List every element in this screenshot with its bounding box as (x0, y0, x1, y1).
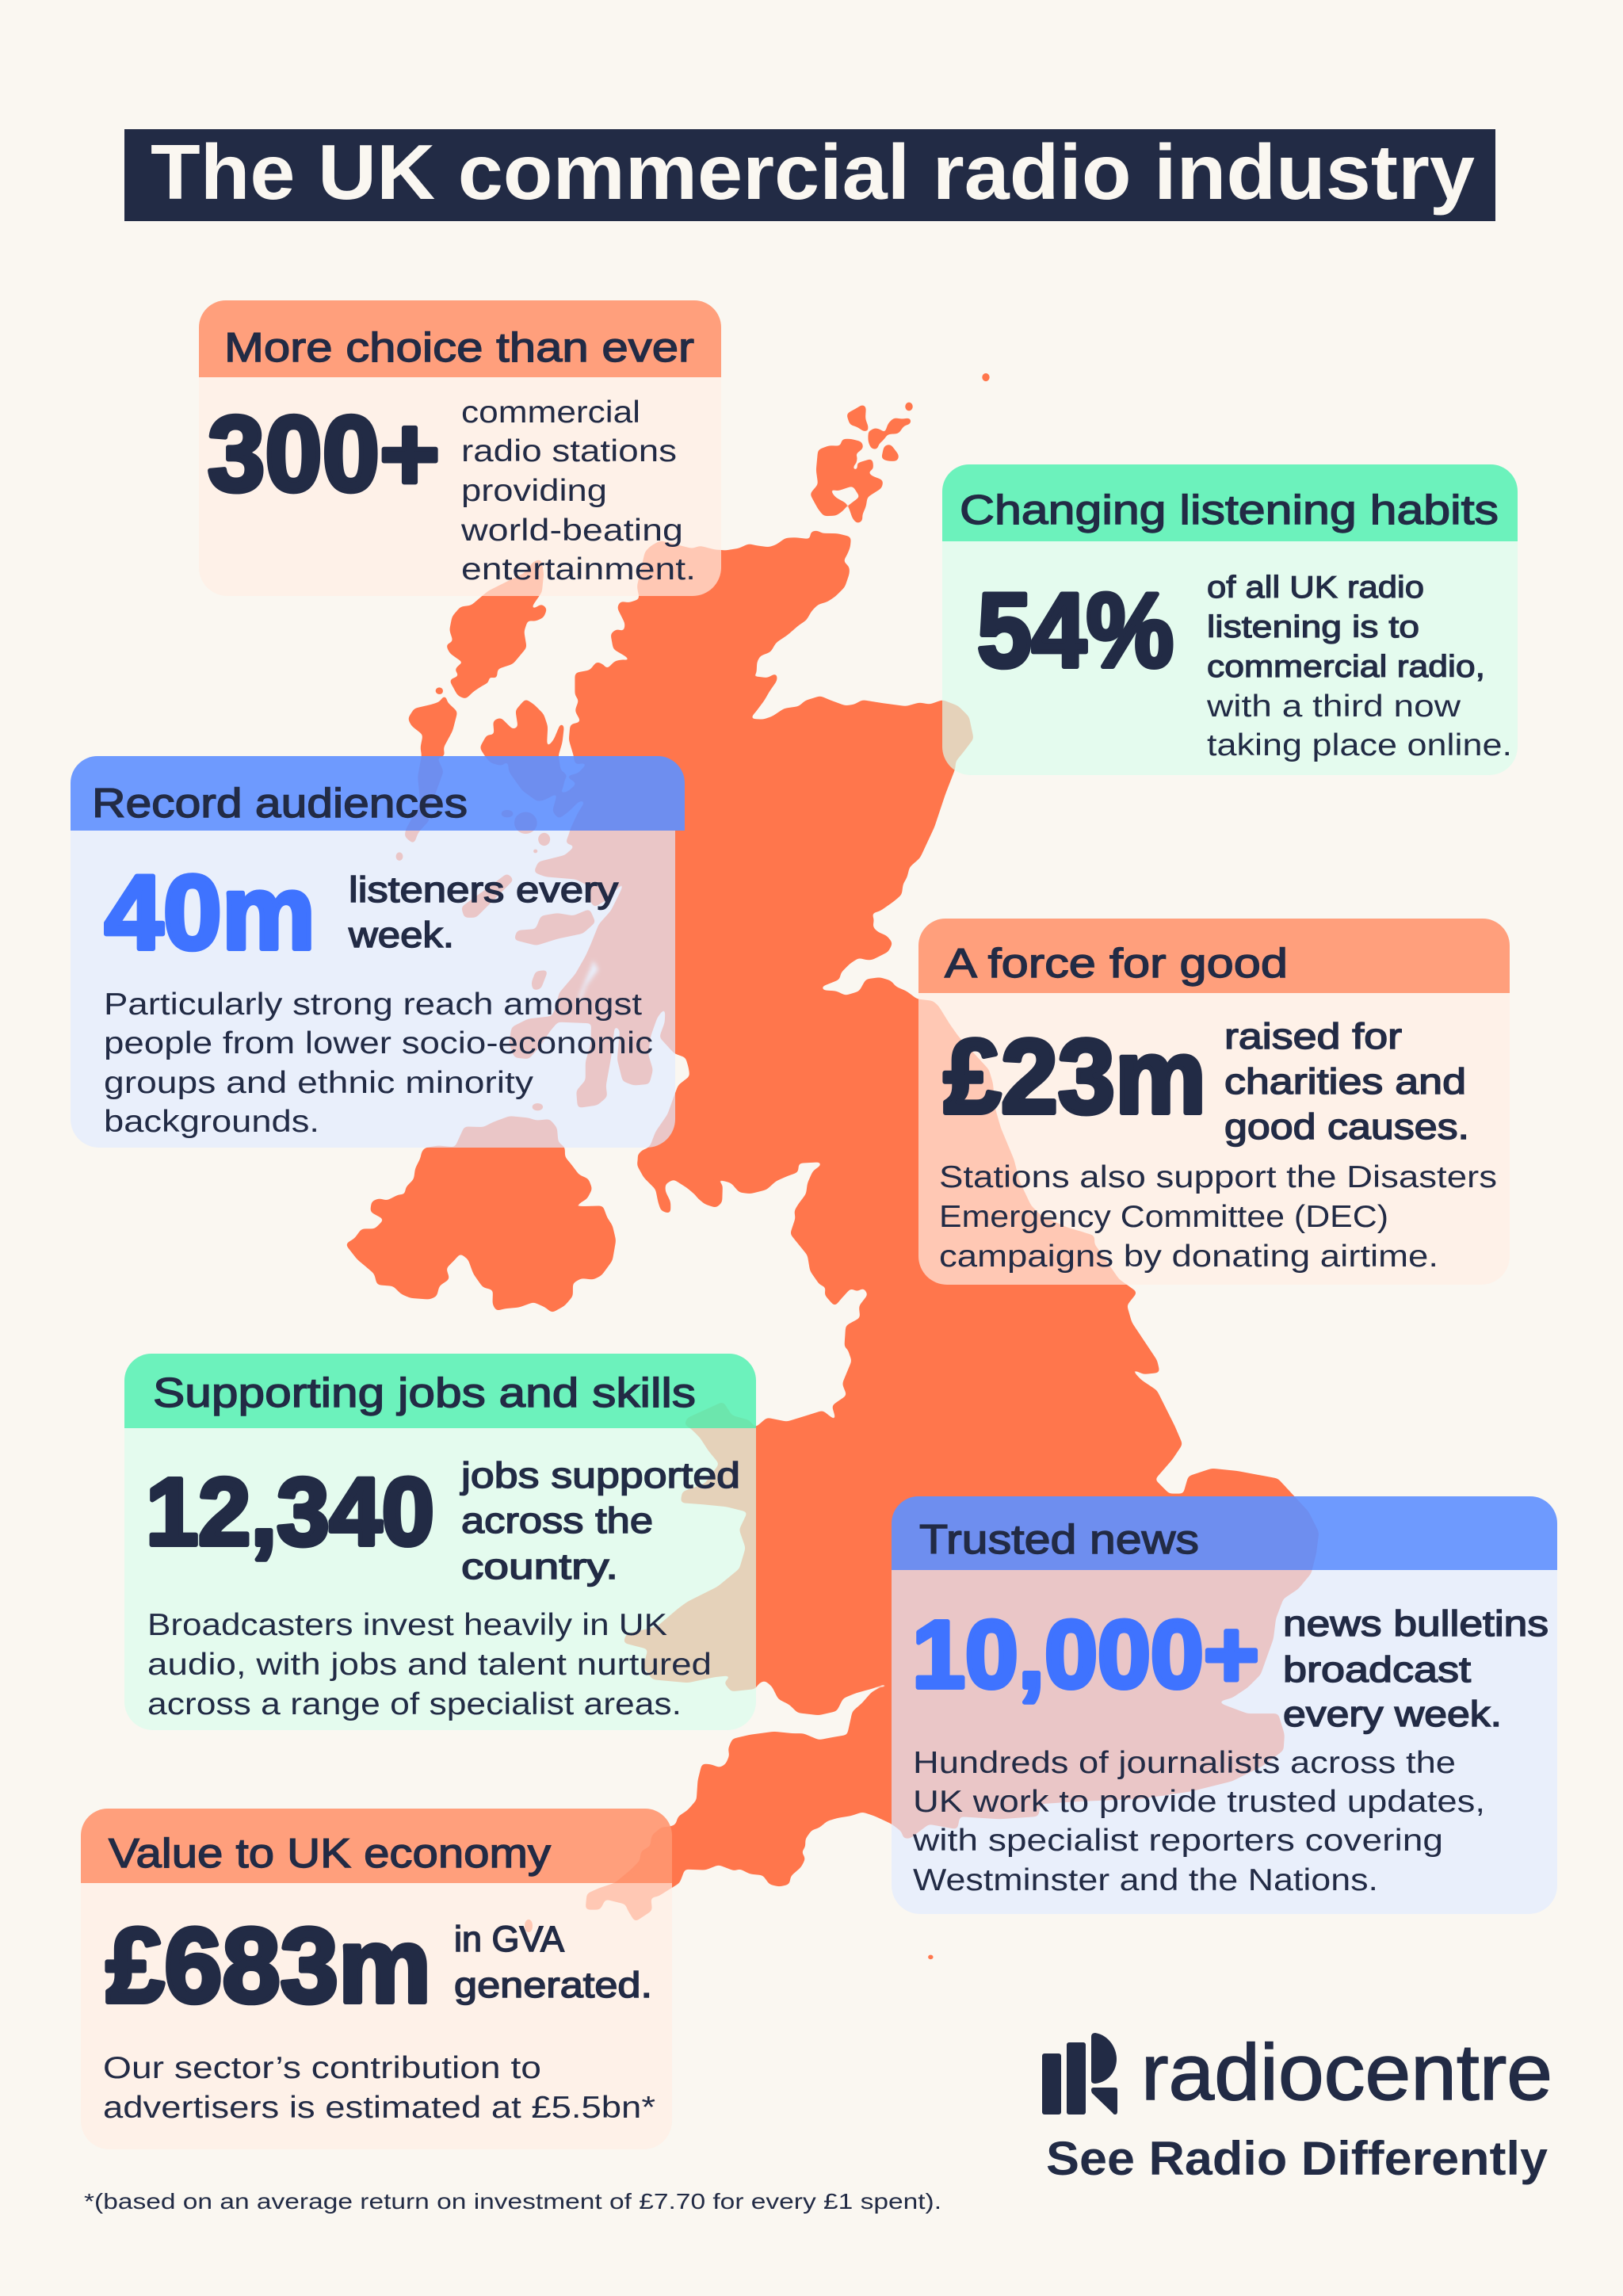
panel: a force for good: £23m (944, 1018, 1206, 1136)
panel: trusted news: broadcast (1283, 1649, 1472, 1690)
panel: a force for good: charities and (1224, 1061, 1466, 1102)
panel: more choice than ever: commercial (461, 395, 640, 430)
panel: changing listening habits: with a third now (1206, 690, 1461, 724)
panel: supporting jobs and skills: country. (461, 1546, 618, 1587)
panel: value to UK economy: generated. (454, 1965, 652, 2005)
panel: supporting jobs and skills: across a range of specialist areas. (147, 1687, 682, 1721)
panel: value to UK economy (81, 1809, 672, 2149)
footnote: *(based on an average return on investment of £7.70 for every £1 spent). (84, 2189, 941, 2214)
panel: trusted news: with specialist reporters covering (912, 1824, 1443, 1858)
panel: a force for good (918, 919, 1510, 1285)
panel: more choice than ever: radio stations (461, 434, 677, 468)
panel: trusted news (892, 1496, 1557, 1914)
panel: trusted news: news bulletins (1283, 1603, 1549, 1644)
panel: record audiences: people from lower socio-economic (104, 1026, 653, 1060)
panel: supporting jobs and skills: jobs supported (460, 1455, 740, 1496)
panel: value to UK economy: £683m (106, 1907, 431, 2025)
panel: value to UK economy: Value to UK economy (109, 1831, 551, 1877)
panel: a force for good: Stations also support the Disasters (939, 1160, 1497, 1194)
panel: value to UK economy: in GVA (454, 1919, 564, 1959)
panel: trusted news: every week. (1283, 1694, 1502, 1734)
panel: value to UK economy: Our sector’s contribution to (103, 2051, 541, 2085)
panel: trusted news: UK work to provide trusted updates, (913, 1785, 1485, 1819)
panel: more choice than ever: world-beating (460, 514, 683, 548)
title: The UK commercial radio industry (151, 128, 1475, 216)
panel: record audiences: listeners every (349, 869, 619, 910)
panel: trusted news: Westminster and the Nations. (913, 1863, 1378, 1897)
panel: supporting jobs and skills: audio, with jobs and talent nurtured (147, 1648, 712, 1682)
panel: trusted news: Trusted news (919, 1517, 1199, 1563)
panel: supporting jobs and skills: across the (461, 1500, 653, 1541)
panel: changing listening habits: taking place online. (1207, 728, 1512, 762)
panel: changing listening habits: of all UK radio (1207, 571, 1424, 605)
panel: record audiences: Particularly strong reach amongst (104, 988, 642, 1022)
tagline: See Radio Differently (1046, 2132, 1549, 2185)
panel: record audiences: Record audiences (92, 781, 468, 827)
panel: record audiences: groups and ethnic minority (104, 1066, 534, 1100)
panel: more choice than ever: 300+ (208, 394, 440, 514)
panel: a force for good: Emergency Committee (DEC) (939, 1200, 1388, 1234)
panel: a force for good: campaigns by donating airtime. (939, 1240, 1438, 1274)
panel: supporting jobs and skills (124, 1354, 756, 1730)
panel: a force for good: raised for (1224, 1016, 1402, 1056)
panel: record audiences: week. (348, 915, 454, 955)
panel: supporting jobs and skills: Broadcasters invest heavily in UK (147, 1608, 667, 1642)
panel: changing listening habits: 54% (977, 572, 1174, 690)
panel: a force for good: good causes. (1224, 1106, 1469, 1147)
panel: changing listening habits (942, 464, 1518, 775)
map of the UK (346, 373, 1318, 1959)
panel: supporting jobs and skills: 12,340 (146, 1457, 434, 1565)
panel: record audiences: backgrounds. (104, 1105, 319, 1139)
panel: record audiences: 40m (105, 854, 315, 972)
panel: changing listening habits: Changing listening habits (960, 487, 1499, 533)
panel: record audiences (71, 756, 685, 1148)
panel: more choice than ever: entertainment. (461, 552, 696, 586)
panel: more choice than ever (199, 300, 721, 596)
panel: trusted news: Hundreds of journalists across the (913, 1746, 1456, 1780)
panel: value to UK economy: advertisers is estimated at £5.5bn* (103, 2091, 655, 2125)
panel: more choice than ever: More choice than ever (224, 325, 694, 371)
panel: trusted news: 10,000+ (912, 1600, 1259, 1708)
panel: changing listening habits: listening is to (1207, 610, 1419, 644)
panel: a force for good: A force for good (945, 941, 1288, 987)
radiocentre logo: radiocentre (1141, 2028, 1552, 2117)
panel: changing listening habits: commercial radio, (1207, 650, 1485, 684)
panel: supporting jobs and skills: Supporting jobs and skills (153, 1370, 696, 1416)
panel: more choice than ever: providing (461, 474, 607, 508)
